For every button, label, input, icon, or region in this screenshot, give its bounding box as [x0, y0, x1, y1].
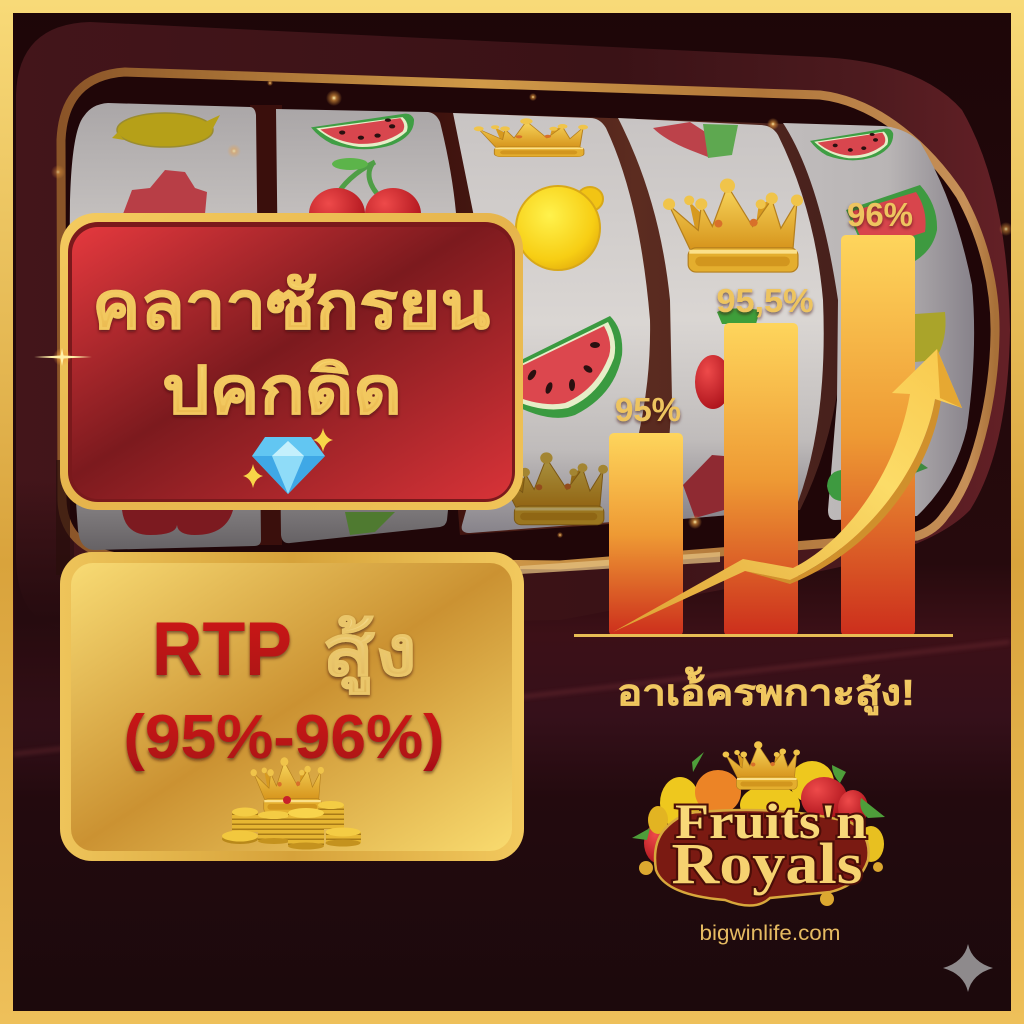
- bar: 95,5%: 95,5%: [716, 282, 814, 319]
- heading: high: สู้ง: [322, 612, 417, 695]
- arrow: upward trend: [613, 349, 962, 632]
- reel 3: [453, 113, 650, 533]
- icon: watermelon: [505, 316, 622, 418]
- reel 1: [70, 103, 261, 550]
- icon: lemon: [516, 186, 603, 270]
- lower frame dim: [56, 460, 150, 575]
- axis line: [574, 634, 953, 637]
- bar: 96%: 96%: [847, 196, 913, 233]
- logo fruits: [632, 752, 885, 864]
- coin stack back left: [232, 808, 258, 832]
- icon: small melon: [827, 470, 841, 501]
- icon: top watermelon: [810, 129, 893, 160]
- logo plaque: [655, 810, 869, 906]
- icon: dim lemon: [915, 312, 946, 362]
- sparkle on panel edge: [34, 348, 92, 366]
- website text: bigwinlife.com: [700, 922, 840, 945]
- logo: Fruits'n Royals: Royals: [672, 831, 862, 896]
- icon: leaf: [915, 459, 928, 473]
- icon: watermelon right: [846, 185, 937, 266]
- icon: big crown: [663, 178, 803, 272]
- heading: red panel second line: ปคกดิด: [162, 353, 402, 427]
- reel 2: [276, 109, 462, 543]
- sparkles: [51, 80, 1013, 538]
- bar: 95,5%: [716, 282, 814, 636]
- bar: 95%: [609, 391, 683, 636]
- icon: watermark star: [943, 944, 993, 992]
- icon: diamond: [243, 428, 333, 494]
- coin stack back right: [318, 801, 344, 829]
- frame fade left: [14, 480, 74, 760]
- icon: cherry: [695, 355, 731, 409]
- coin stack middle: [258, 811, 290, 844]
- slot machine: [14, 22, 1013, 760]
- reel 4: [618, 118, 824, 520]
- icon: dim leaf fruit: [345, 512, 395, 535]
- panel: red title: [34, 213, 523, 510]
- coin stack right: [326, 828, 361, 846]
- coin flat left: [222, 830, 258, 844]
- bar: 96%: [841, 196, 915, 636]
- gold strip glow: [520, 552, 720, 574]
- reel 5: [783, 123, 974, 520]
- coin stack front: [288, 808, 324, 850]
- icon: crown and coins: [222, 757, 361, 850]
- icon: top crown: [474, 118, 588, 157]
- text: percent range: (95%-96%): [124, 703, 444, 772]
- icon: dim crown: [494, 452, 608, 525]
- chart: rising RTP bars: [574, 196, 962, 637]
- icon: dim red fruit: [683, 455, 724, 518]
- bar: 95%: 95%: [615, 391, 681, 428]
- logo: Fruits'n Royals: [632, 741, 885, 906]
- icon: top fruit: [653, 122, 710, 157]
- icon: dim cherries: [122, 510, 233, 535]
- machine inner window: [61, 72, 995, 565]
- icon: dim lemon: [112, 113, 220, 147]
- icon: leaf behind bar: [717, 308, 760, 324]
- heading: RTP: RTP: [152, 607, 292, 692]
- heading: red panel: คลาาซักรยน: [92, 268, 490, 342]
- icon: cherries: [309, 158, 421, 240]
- panel: gold RTP: [60, 552, 524, 861]
- logo crown: [723, 741, 800, 790]
- caption: chart: อาเอ้ัครพกาะสู้ง!: [617, 666, 915, 716]
- machine outer frame: [16, 22, 1010, 628]
- logo wordmark: Fruits'n: [675, 793, 867, 849]
- reel gaps: [250, 105, 845, 545]
- icon: red fruit: [123, 170, 207, 214]
- icon: watermelon slice: [311, 114, 414, 149]
